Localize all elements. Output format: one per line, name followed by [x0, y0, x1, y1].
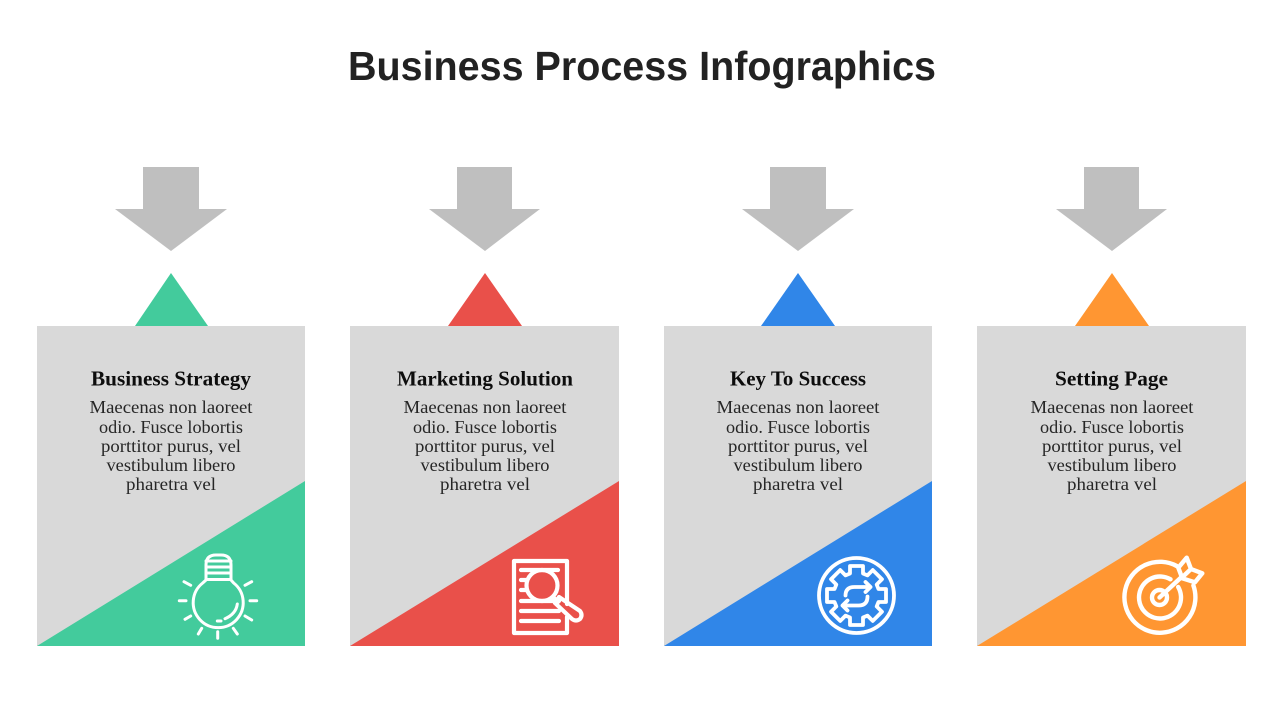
text block 3: Maecenas non laoreet — [716, 397, 880, 417]
text block 4: porttitor purus, vel — [1042, 436, 1182, 456]
text block 3: pharetra vel — [753, 474, 843, 494]
text block 3 — [716, 397, 880, 494]
text block 2: Maecenas non laoreet — [404, 397, 567, 417]
text block 2: odio. Fusce lobortis — [413, 417, 557, 437]
text block 2 — [404, 397, 567, 494]
text block 1: vestibulum libero — [106, 455, 236, 475]
arrow: down 1 — [115, 167, 227, 251]
panel: marketing solution — [350, 167, 619, 646]
text block 1: Maecenas non laoreet — [90, 397, 253, 417]
panel: setting page — [977, 167, 1246, 646]
text block 1 — [90, 397, 253, 494]
card background 2 — [350, 326, 619, 646]
text block 3: vestibulum libero — [734, 455, 863, 475]
icon: document with magnifier — [514, 561, 582, 633]
card background 3 — [664, 326, 932, 646]
corner wedge: blue — [664, 481, 932, 646]
heading: setting page: Setting Page — [1055, 366, 1168, 390]
text block 1: porttitor purus, vel — [101, 436, 241, 456]
title: Business Process Infographics — [348, 43, 936, 89]
corner wedge: red — [350, 481, 619, 646]
accent triangle: orange — [1075, 273, 1149, 326]
text block 4: pharetra vel — [1067, 474, 1157, 494]
text block 3: odio. Fusce lobortis — [726, 417, 870, 437]
heading: marketing solution: Marketing Solution — [397, 366, 573, 390]
icon: light bulb — [179, 555, 257, 638]
text block 1: pharetra vel — [126, 474, 216, 494]
text block 2: vestibulum libero — [420, 455, 550, 475]
accent triangle: green — [135, 273, 208, 326]
panel: key to success — [664, 167, 932, 646]
heading: key to success: Key To Success — [730, 366, 866, 390]
heading: business strategy: Business Strategy — [91, 366, 251, 390]
accent triangle: red — [448, 273, 522, 326]
accent triangle: blue — [761, 273, 835, 326]
card background 1 — [37, 326, 305, 646]
arrow: down 4 — [1056, 167, 1167, 251]
corner wedge: green — [37, 481, 305, 646]
text block 1: odio. Fusce lobortis — [99, 417, 243, 437]
icon: gear with cycle arrows — [819, 558, 894, 633]
text block 2: porttitor purus, vel — [415, 436, 555, 456]
text block 4 — [1030, 397, 1194, 494]
arrow: down 2 — [429, 167, 540, 251]
text block 2: pharetra vel — [440, 474, 530, 494]
text block 4: vestibulum libero — [1048, 455, 1177, 475]
text block 3: porttitor purus, vel — [728, 436, 868, 456]
card background 4 — [977, 326, 1246, 646]
corner wedge: orange — [977, 481, 1246, 646]
arrow: down 3 — [742, 167, 854, 251]
text block 4: Maecenas non laoreet — [1030, 397, 1194, 417]
icon: target with arrow — [1124, 558, 1202, 633]
text block 4: odio. Fusce lobortis — [1040, 417, 1184, 437]
panel: business strategy — [37, 167, 305, 646]
